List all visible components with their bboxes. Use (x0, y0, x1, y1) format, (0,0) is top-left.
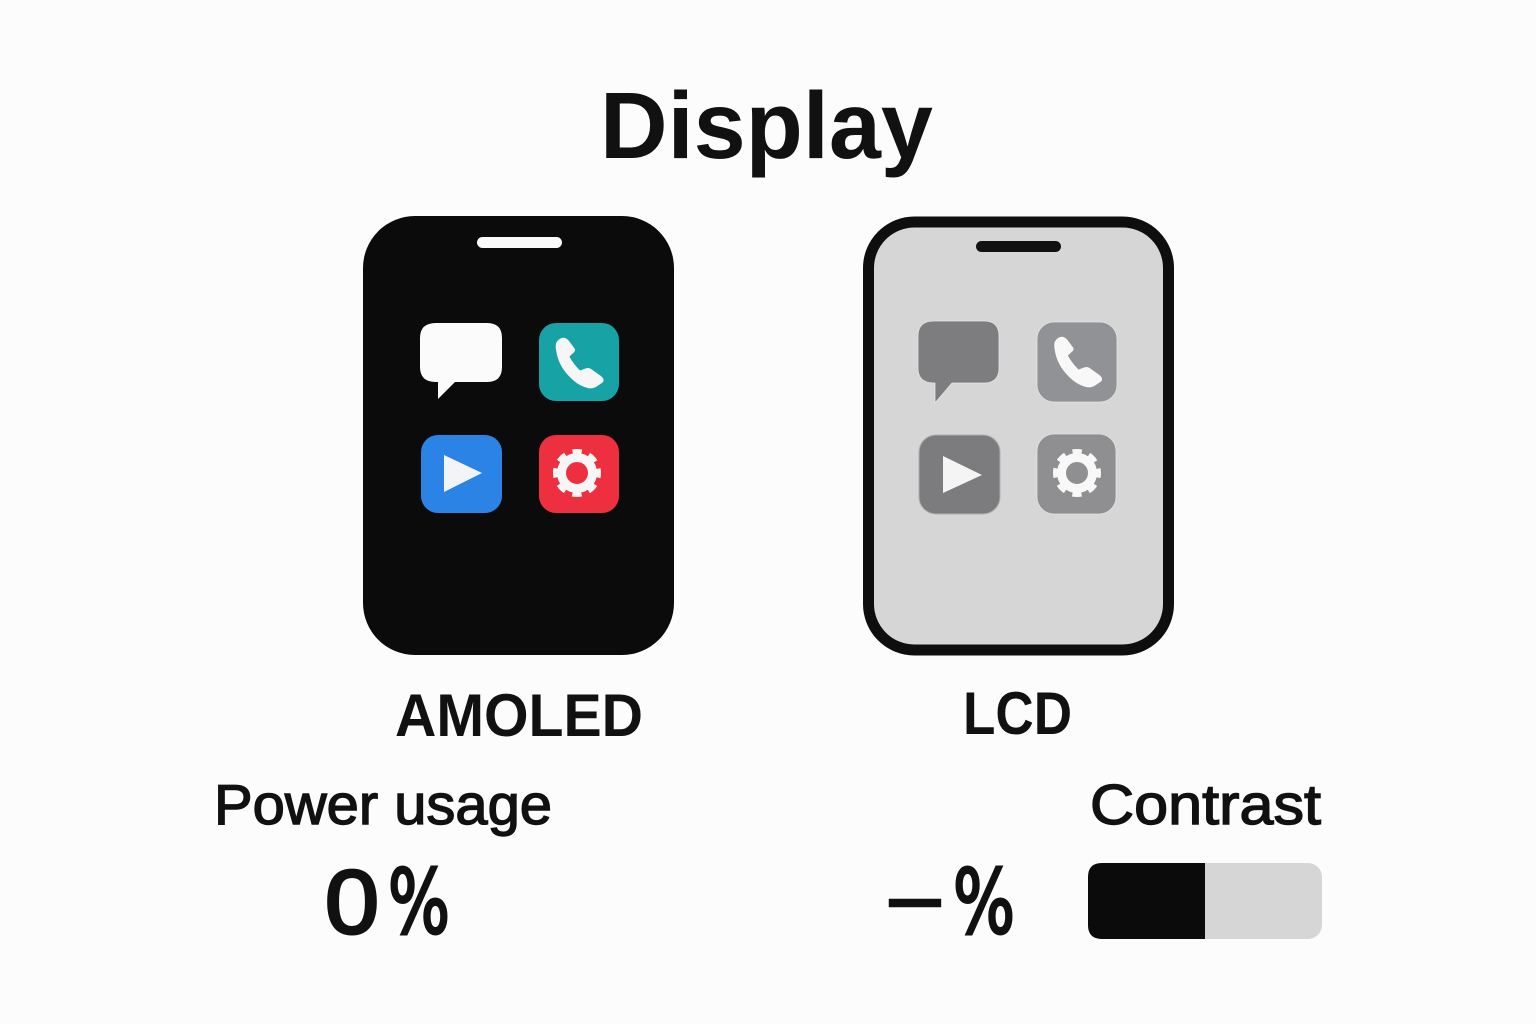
label: LCD: LCD (963, 680, 1072, 747)
icon: teal phone (539, 323, 619, 401)
icon: blue play (421, 435, 502, 513)
value: power usage 0% (325, 851, 450, 954)
panel: LCD phone (868, 222, 1168, 650)
notch: white (477, 237, 562, 248)
icon: grey chat bubble (918, 321, 999, 403)
icon: grey settings gear (1037, 434, 1116, 514)
value: power usage 0%: 0 (325, 853, 379, 953)
value: contrast placeholder -%: – (890, 846, 941, 946)
phone body: grey with black frame (868, 222, 1168, 650)
phone body: black (363, 216, 674, 655)
heading: contrast: Contrast (1090, 773, 1321, 837)
value: contrast placeholder -%: % (953, 851, 1015, 954)
icon: white chat bubble (420, 323, 502, 399)
icon: grey play (919, 435, 1000, 514)
title: Display (600, 73, 933, 179)
icon: red settings gear (539, 435, 619, 513)
value: contrast placeholder -% (890, 846, 1015, 954)
heading: power usage: Power usage (214, 773, 552, 837)
panel: AMOLED phone (363, 216, 674, 655)
contrast swatch bar (1088, 863, 1322, 939)
value: power usage 0%: % (388, 851, 450, 954)
icon: grey phone (1037, 322, 1117, 402)
notch: black (976, 241, 1061, 252)
label: AMOLED: AMOLED (395, 682, 643, 749)
